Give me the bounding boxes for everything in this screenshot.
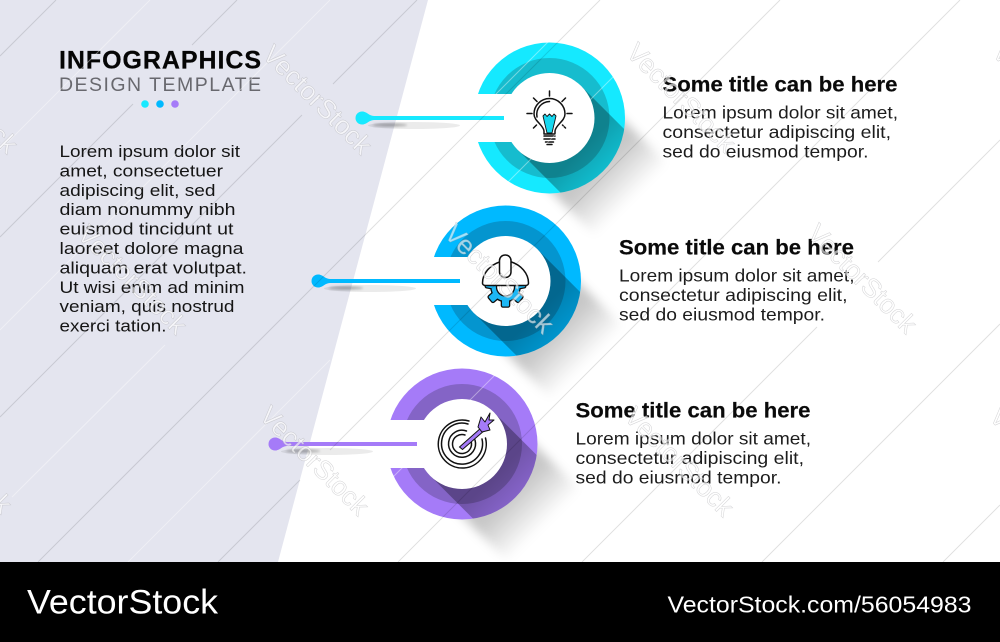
connector line 3 (268, 438, 417, 455)
subtitle: design template: DESIGN TEMPLATE (59, 74, 261, 96)
text block 3 (576, 400, 811, 488)
step 2 description: Lorem ipsum dolor sit amet, (619, 265, 854, 285)
background panel (0, 0, 428, 562)
ring 2 (434, 206, 615, 390)
icon: light bulb (527, 91, 572, 144)
left intro paragraph: laoreet dolore magna (60, 239, 244, 258)
step 3 description: consectetur adipiscing elit, (576, 448, 804, 468)
ring 1 (478, 42, 659, 228)
text block 2 (619, 237, 854, 325)
footer image id: VectorStock.com/56054983 (668, 591, 972, 617)
step 1 description: sed do eiusmod tempor. (662, 142, 868, 162)
step 1 description: consectetur adipiscing elit, (662, 122, 891, 142)
connector line 2 (312, 274, 460, 292)
step 1: light bulb (356, 42, 897, 228)
step 2 title: Some title can be here (619, 237, 854, 260)
step 3 description: Lorem ipsum dolor sit amet, (576, 428, 811, 448)
title: infographics: INFOGRAPHICS (59, 46, 261, 74)
step 1 description: Lorem ipsum dolor sit amet, (662, 102, 898, 122)
watermarks: VectorStock (439, 218, 560, 340)
watermarks: VectorStock (619, 401, 740, 523)
step 2 description: sed do eiusmod tempor. (619, 305, 825, 325)
connector line 1 (356, 112, 504, 129)
three colour dots (141, 100, 179, 108)
step 3 description: sed do eiusmod tempor. (576, 468, 782, 488)
left intro paragraph: exerci tation. (60, 317, 166, 336)
step 2: helmet and gear (312, 206, 854, 390)
heading (59, 46, 261, 108)
text block 1 (662, 74, 898, 162)
watermarks: VectorStock (72, 219, 193, 341)
left intro paragraph: euismod tincidunt ut (60, 220, 234, 239)
icon: helmet and gear (482, 255, 528, 306)
footer logo: VectorStock (27, 583, 219, 621)
left intro paragraph: veniam, quis nostrud (60, 297, 234, 316)
watermarks: VectorStock (254, 400, 375, 522)
step 1 title: Some title can be here (662, 74, 898, 97)
step 3 title: Some title can be here (576, 400, 810, 423)
left intro paragraph: diam nonummy nibh (60, 200, 236, 219)
step 3: target (268, 368, 810, 554)
left intro paragraph: Lorem ipsum dolor sit (60, 142, 240, 161)
left intro paragraph: aliquam erat volutpat. (60, 258, 247, 277)
watermarks: VectorStock (802, 218, 923, 340)
watermarks: VectorStock (257, 39, 378, 161)
watermarks (0, 37, 1000, 523)
left intro paragraph: amet, consectetuer (60, 161, 223, 180)
ring 3 (390, 368, 572, 554)
left intro paragraph: adipiscing elit, sed (60, 181, 216, 200)
icon: target and arrow (438, 413, 494, 468)
footer bar (0, 562, 1000, 642)
watermarks: VectorStock (621, 37, 742, 159)
step 2 description: consectetur adipiscing elit, (619, 285, 848, 305)
left intro paragraph: Ut wisi enim ad minim (60, 278, 244, 297)
